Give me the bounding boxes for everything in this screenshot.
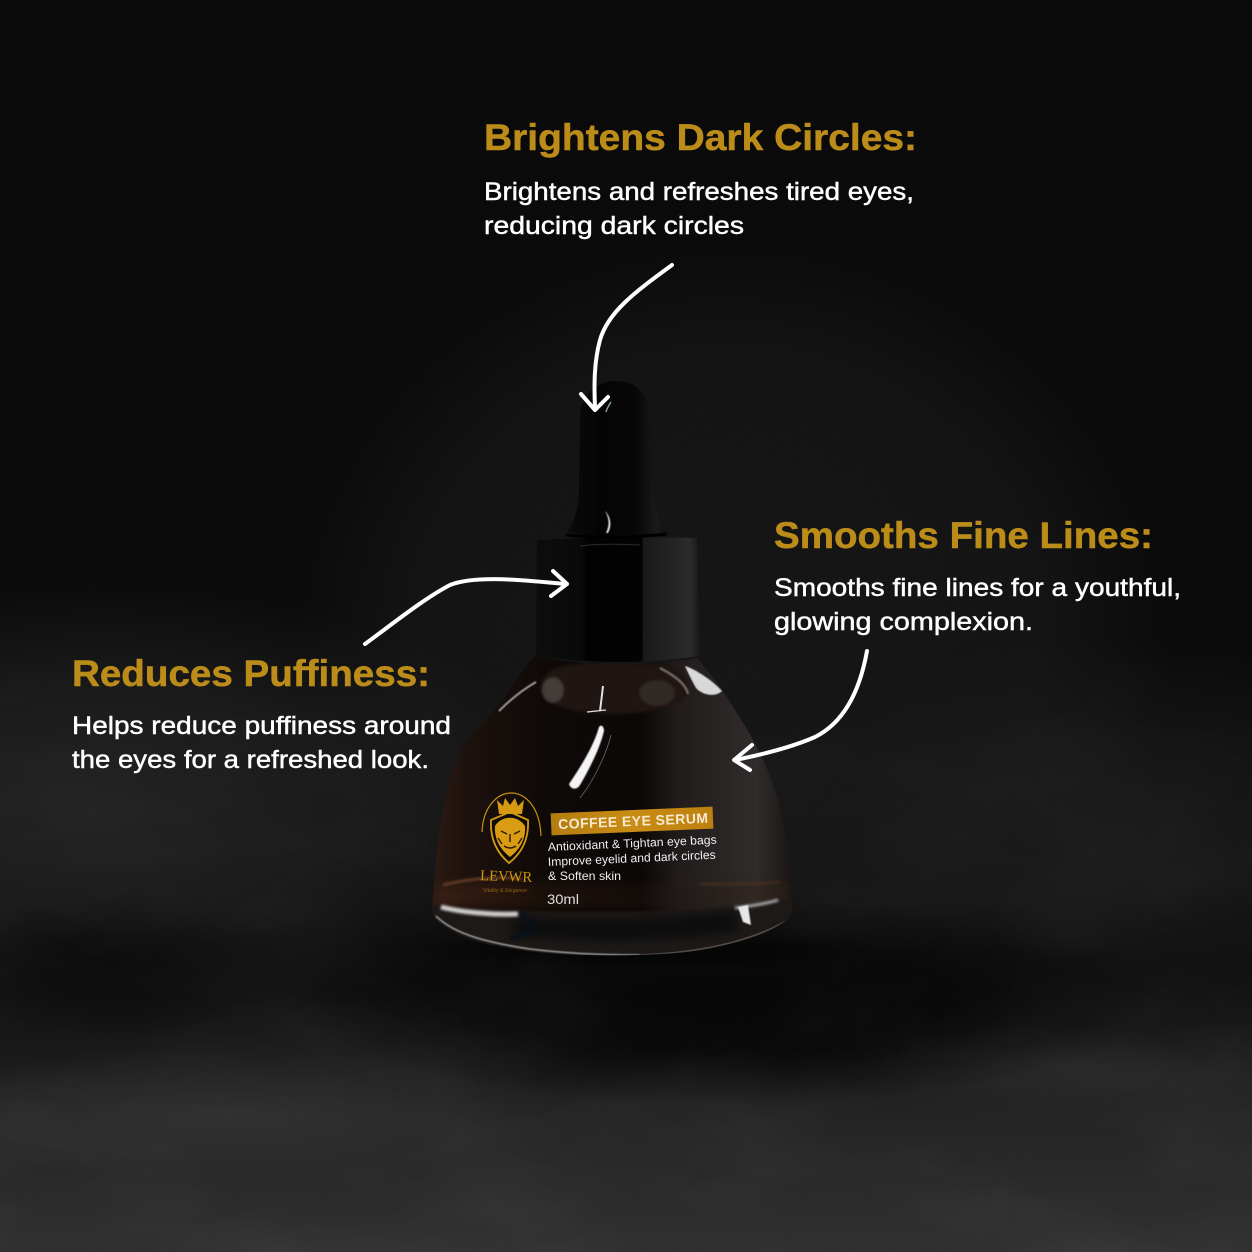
description: Helps reduce puffiness around bbox=[72, 712, 451, 740]
description: reducing dark circles bbox=[484, 212, 744, 240]
dropper bulb bbox=[566, 381, 667, 537]
description: Brightens and refreshes tired eyes, bbox=[484, 178, 914, 206]
label: product description: & Soften skin bbox=[548, 869, 621, 883]
glass highlights bbox=[685, 666, 722, 695]
heading: Brightens Dark Circles: bbox=[484, 117, 917, 158]
heading: Smooths Fine Lines: bbox=[774, 515, 1153, 556]
label: brand logo bbox=[480, 793, 541, 894]
arrow: to collar cap bbox=[365, 571, 567, 644]
label: brand logo: Vitality & Elegance bbox=[483, 888, 527, 894]
description: the eyes for a refreshed look. bbox=[72, 746, 429, 774]
description: glowing complexion. bbox=[774, 608, 1033, 636]
glass body bbox=[430, 650, 795, 960]
description bbox=[484, 178, 914, 240]
description bbox=[774, 574, 1181, 636]
base glass bbox=[432, 904, 776, 955]
callout: brightens dark circles bbox=[484, 117, 917, 240]
heading: Reduces Puffiness: bbox=[72, 653, 430, 694]
label: product description bbox=[547, 833, 717, 907]
product: serum dropper bottle bbox=[430, 381, 795, 960]
callout: smooths fine lines bbox=[774, 515, 1181, 636]
label: product description: 30ml bbox=[547, 891, 579, 907]
label: brand logo: LEVWR bbox=[480, 868, 532, 886]
callout: reduces puffiness bbox=[72, 653, 451, 774]
liquid meniscus tint bbox=[434, 880, 790, 909]
arrow: to glass body bbox=[734, 651, 867, 770]
arrow: to dropper bulb bbox=[581, 265, 672, 410]
base reflections bbox=[441, 907, 518, 914]
description: Smooths fine lines for a youthful, bbox=[774, 574, 1181, 602]
label: product description: Improve eyelid and dark circles bbox=[548, 848, 716, 869]
label: product description: Antioxidant & Tightan eye bags bbox=[548, 833, 717, 854]
collar cap bbox=[536, 537, 700, 662]
description bbox=[72, 712, 451, 774]
label: product name: COFFEE EYE SERUM bbox=[558, 810, 708, 832]
shoulder ring bbox=[541, 662, 688, 714]
